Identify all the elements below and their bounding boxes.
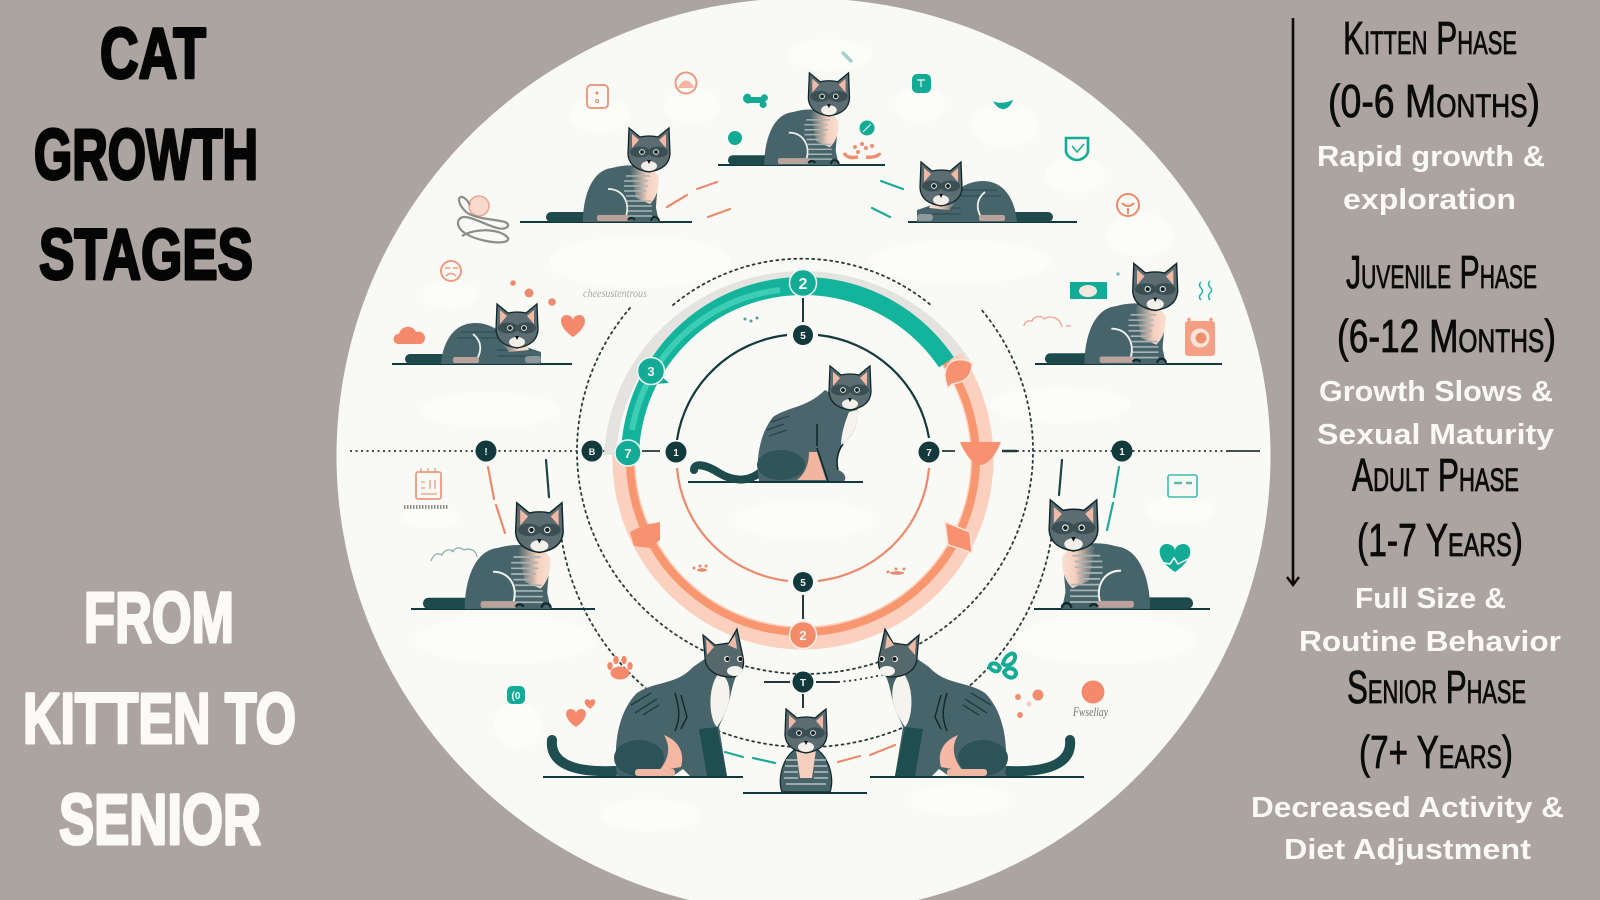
node: teal 3 [638, 358, 669, 384]
icon: coral dots [1015, 690, 1044, 718]
icon: teal ball [728, 131, 742, 145]
coral bubbles [510, 280, 556, 306]
icon: teal badge [507, 686, 525, 704]
subtitle: from kitten to senior: FROM [84, 579, 234, 658]
inner stage circle [677, 335, 929, 581]
ring marker: coral arrow lower right [945, 522, 972, 553]
icon: teal shield check [1066, 138, 1088, 160]
icon: teal striped ball [860, 120, 874, 136]
phase: senior [1251, 661, 1564, 866]
paw prints small [692, 564, 906, 575]
icon: teal badge: (0 [512, 691, 521, 702]
icon: coloured arches [431, 548, 477, 561]
cat stage: top centre kitten [718, 73, 885, 165]
cat stage: right juvenile [1035, 263, 1222, 364]
node: far right 1 [1112, 440, 1132, 462]
node: teal 3: 3 [647, 364, 655, 379]
icon: teal square badge [912, 74, 931, 93]
phase: kitten: exploration [1343, 184, 1516, 216]
cat stage: top left kitten [520, 128, 692, 222]
icon: teal squiggles [1200, 281, 1212, 300]
phase: adult [1299, 449, 1561, 658]
icon: coral clock [1117, 194, 1139, 216]
dashes [488, 181, 1119, 763]
subtitle: from kitten to senior: KITTEN TO [23, 680, 296, 759]
title: cat growth stages: CAT [100, 15, 206, 94]
node: bottom S: 5 [800, 578, 806, 589]
icon: coral paw [607, 656, 633, 680]
icon: coral outlined cloud [1024, 317, 1071, 327]
central adult cat [688, 366, 871, 482]
phase: adult: Adult Phase [1352, 449, 1519, 501]
phase: juvenile [1317, 246, 1556, 451]
icon: pale pill [843, 53, 851, 61]
node: outer left B [582, 440, 602, 462]
node: inner right [918, 442, 940, 462]
signature script: Fwsellay [1072, 704, 1108, 719]
cat stage: left lower juvenile [411, 503, 595, 609]
node: bottom T [792, 672, 814, 692]
icon: coral round bowl [676, 72, 696, 94]
node: coral 2 [790, 622, 816, 648]
node: outer left B: B [589, 447, 596, 457]
icon: coral face circle [441, 261, 461, 281]
node: top S [793, 325, 813, 345]
ring marker: coral down arrow right [960, 442, 1001, 465]
phase: adult: Routine Behavior [1299, 626, 1561, 658]
node: inner right: 7 [926, 448, 932, 459]
node: bottom S [793, 572, 813, 592]
phase: senior: Diet Adjustment [1284, 834, 1531, 866]
node: coral 2: 2 [799, 628, 807, 643]
tiny caption [404, 505, 448, 509]
cat stage: bottom centre kitten front view [743, 709, 867, 793]
timeline arrow [1287, 18, 1299, 585]
icon: coral ball [1082, 680, 1104, 704]
faint background clouds [400, 39, 1214, 831]
dotted guide circles [560, 259, 1052, 747]
node: far left [476, 440, 496, 462]
node: inner left [666, 442, 686, 462]
main white circle panel [336, 0, 1270, 900]
icon: teal bird [993, 100, 1013, 109]
phase: juvenile: Sexual Maturity [1317, 419, 1554, 451]
phase: senior: (7+ Years) [1359, 726, 1513, 778]
paw prints teal small [744, 316, 758, 322]
cat stage: bottom left adult [543, 629, 744, 777]
node: teal 2: 2 [799, 276, 808, 293]
node: teal 7: 7 [624, 446, 632, 461]
icon: teal banknote [1070, 282, 1107, 299]
cat stage: right lower juvenile [1034, 500, 1210, 609]
icon: coral calendar [416, 468, 441, 499]
node: bottom T: T [800, 678, 806, 689]
icon: coral kibble [844, 142, 880, 158]
ring marker: coral arrow lower left [630, 522, 660, 548]
node: teal 2 [790, 270, 816, 296]
ring nodes [476, 270, 1132, 692]
phase: kitten [1317, 12, 1545, 216]
watermark script: cheesustentrous [583, 286, 647, 300]
icon: yarn swirl [458, 196, 508, 242]
node: far right 1: 1 [1119, 447, 1125, 458]
node: top S: 5 [800, 331, 806, 342]
phase: adult: (1-7 Years) [1357, 514, 1523, 566]
title: cat growth stages: GROWTH [34, 116, 258, 195]
node: teal 7 [615, 440, 641, 466]
subtitle: from kitten to senior [23, 579, 296, 860]
subtitle: from kitten to senior: SENIOR [59, 781, 261, 860]
cat stage: left lying kitten [392, 304, 572, 364]
cat stage: bottom right adult [870, 629, 1084, 777]
small teal dot [1116, 272, 1120, 276]
phase: kitten: Rapid growth & [1317, 141, 1545, 173]
icon: teal pulse heart [1160, 544, 1190, 572]
title: cat growth stages: STAGES [39, 216, 253, 295]
title: cat growth stages [34, 15, 258, 295]
phase: adult: Full Size & [1355, 583, 1506, 615]
cat stage: top right lying kitten [908, 162, 1077, 222]
node: inner left: 1 [673, 448, 679, 459]
icon: coral hearts [566, 699, 595, 727]
growth ring [610, 277, 982, 638]
phase: kitten: (0-6 Months) [1328, 75, 1540, 127]
icon: teal card [1168, 475, 1197, 497]
icon: teal butterfly [990, 654, 1016, 678]
phase: juvenile: Growth Slows & [1319, 376, 1553, 408]
ring marker: coral blob upper right [945, 360, 972, 388]
icon: coral cloud [393, 327, 425, 344]
icon: teal bone [743, 94, 768, 108]
phase: kitten: Kitten Phase [1343, 12, 1517, 64]
horizontal timeline axis [350, 298, 1260, 708]
icon: coral heart [561, 315, 585, 337]
node: far left: ! [484, 447, 488, 458]
phase: senior: Decreased Activity & [1251, 792, 1564, 824]
icon: coral bag [1185, 318, 1215, 356]
icon: coral square [587, 85, 608, 108]
